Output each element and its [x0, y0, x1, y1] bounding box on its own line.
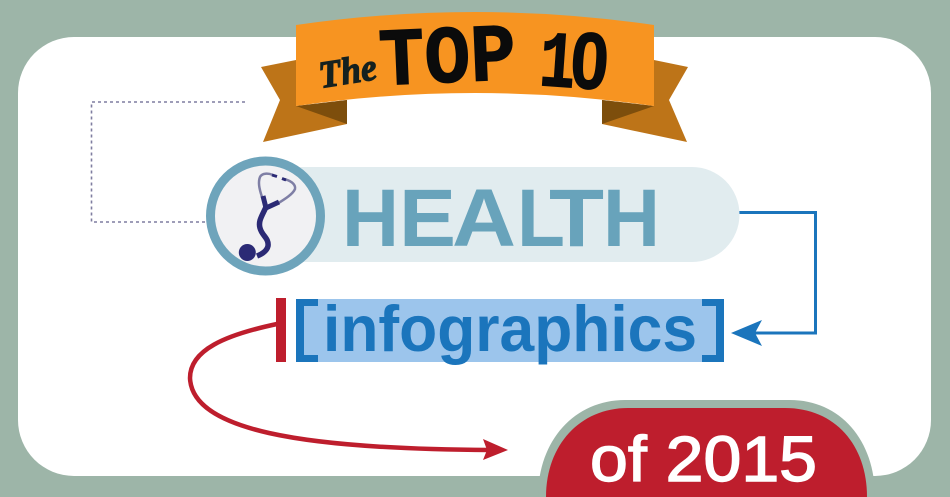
text: TOP: TOP — [377, 11, 518, 110]
health pill — [290, 167, 740, 264]
label background — [296, 299, 724, 362]
ribbon left fold — [296, 100, 347, 124]
infographics label — [296, 292, 724, 365]
ribbon right tail — [602, 60, 688, 142]
badge fill — [546, 408, 867, 497]
pill background — [290, 167, 740, 262]
text: HEALTH: A — [452, 173, 516, 264]
text: The: The — [316, 46, 380, 97]
dotted connector — [92, 102, 245, 222]
text: HEALTH — [342, 173, 660, 264]
text: HEALTH: E — [399, 173, 456, 264]
text: infographics: infographics — [323, 292, 697, 365]
text: 10: 0 — [568, 15, 612, 107]
icon: stethoscope badge — [210, 161, 320, 271]
text: HEALTH: L — [517, 173, 565, 264]
ribbon left tail — [261, 60, 347, 142]
ribbon right fold — [602, 100, 654, 124]
ribbon main band — [296, 12, 654, 106]
year badge — [538, 400, 875, 497]
badge outline — [538, 400, 875, 497]
text: of 2015: of 2015 — [590, 423, 817, 495]
left bracket — [296, 299, 318, 362]
banner ribbon — [261, 11, 688, 142]
blue connector arrow — [731, 212, 816, 346]
text: HEALTH: H — [603, 173, 660, 264]
text: HEALTH: T — [549, 173, 604, 264]
red connector arrow — [190, 298, 508, 460]
right bracket — [702, 299, 724, 362]
text: 10 — [536, 13, 612, 115]
text: HEALTH: H — [342, 173, 399, 264]
text: 10: 1 — [536, 19, 579, 112]
